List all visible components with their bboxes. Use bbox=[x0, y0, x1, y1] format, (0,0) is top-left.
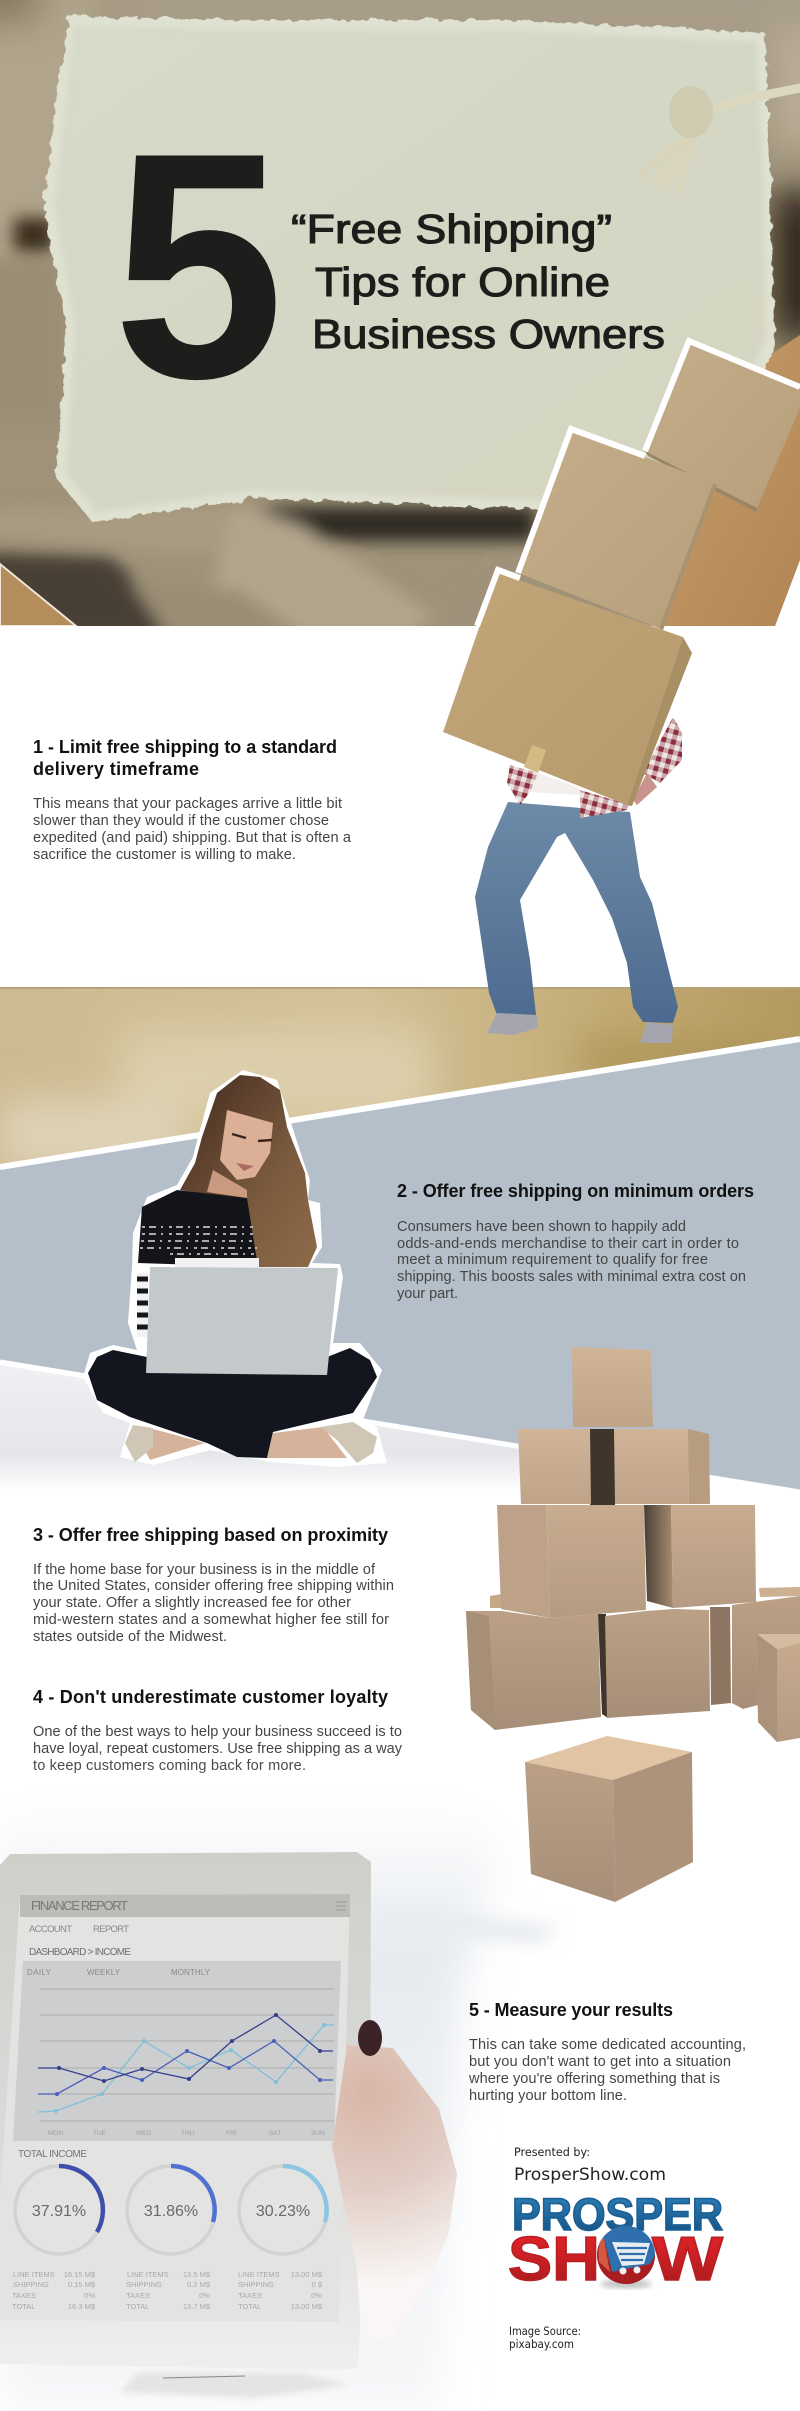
heading 2 block: 2 - Offer free shipping on minimum orders bbox=[397, 1181, 754, 1201]
income tables: 0% bbox=[199, 2291, 210, 2300]
screen header: ACCOUNT bbox=[29, 1924, 72, 1935]
tape bbox=[524, 745, 546, 773]
paragraph 4: One of the best ways to help your business succeed is to bbox=[33, 1724, 402, 1740]
income tables: LINE ITEMS bbox=[13, 2270, 55, 2279]
shoes bbox=[487, 1013, 673, 1043]
second row boxes bbox=[518, 1429, 710, 1504]
heading 4 block: 4 - Don't underestimate customer loyalty bbox=[33, 1687, 388, 1707]
income tables: 16.15 M$ bbox=[64, 2270, 96, 2279]
income tables: TAXES bbox=[12, 2291, 36, 2300]
paragraph 4 bbox=[33, 1724, 403, 1774]
title text: Tips for Online bbox=[315, 259, 610, 305]
pile of cardboard boxes bbox=[466, 1347, 800, 1902]
income tables: 0.2 M$ bbox=[187, 2280, 211, 2289]
paragraph 2: meet a minimum requirement to qualify for free bbox=[397, 1252, 708, 1268]
line chart: DAILY bbox=[27, 1968, 52, 1977]
lone box bbox=[525, 1736, 693, 1902]
tablet body bbox=[0, 1852, 371, 2370]
presented by text: ProsperShow.com bbox=[514, 2165, 666, 2184]
plaid shirt bbox=[507, 717, 682, 818]
screen header bbox=[20, 1894, 350, 1958]
total income donut charts: 37.91% bbox=[32, 2203, 86, 2220]
line chart: TUE bbox=[93, 2130, 107, 2137]
line chart: SAT bbox=[269, 2130, 281, 2137]
paragraph 2: Consumers have been shown to happily add bbox=[397, 1219, 686, 1235]
total income donut charts: 31.86% bbox=[144, 2203, 198, 2220]
paragraph 2 bbox=[397, 1219, 746, 1302]
income tables bbox=[12, 2270, 323, 2311]
kraft box backdrop bbox=[650, 335, 800, 626]
paragraph 3: If the home base for your business is in the middle of bbox=[33, 1562, 376, 1578]
screen header: REPORT bbox=[93, 1924, 129, 1935]
line chart: SUN bbox=[311, 2130, 325, 2137]
jeans bbox=[475, 802, 678, 1023]
paragraph 2: shipping. This boosts sales with minimal extra cost on bbox=[397, 1269, 746, 1285]
income tables: 0% bbox=[84, 2291, 95, 2300]
image source text bbox=[509, 2324, 581, 2351]
blue-grey diagonal panel bbox=[0, 1039, 800, 1520]
income tables: SHIPPING bbox=[13, 2280, 49, 2289]
paragraph 3: mid-western states and a somewhat higher fee still for bbox=[33, 1612, 389, 1628]
income tables: LINE ITEMS bbox=[238, 2270, 280, 2279]
screen header: FINANCE REPORT bbox=[31, 1898, 128, 1913]
heading 3 block: 3 - Offer free shipping based on proximity bbox=[33, 1525, 388, 1545]
striped sleeve bbox=[137, 1273, 148, 1337]
big number 5: 5 bbox=[113, 87, 284, 446]
top box bbox=[645, 341, 800, 512]
bottom row boxes bbox=[466, 1587, 800, 1742]
middle box bbox=[518, 429, 717, 630]
hero paper tag bbox=[43, 16, 800, 522]
image source text: Image Source: bbox=[509, 2324, 581, 2338]
top box bbox=[572, 1347, 653, 1427]
total income donut charts bbox=[15, 2149, 327, 2254]
paragraph 5: where you're offering something that is bbox=[468, 2071, 720, 2087]
fingernail bbox=[358, 2020, 382, 2056]
heading 5 block bbox=[468, 2000, 746, 2104]
icon: rope and knot bbox=[642, 86, 800, 192]
logo: Prosper Show: SH bbox=[508, 2225, 600, 2294]
cardboard corner bbox=[0, 564, 76, 626]
title text: “Free Shipping” bbox=[291, 206, 612, 252]
title bbox=[113, 87, 665, 446]
paragraph 2: odds-and-ends merchandise to their cart in order to bbox=[397, 1236, 739, 1252]
paragraph 2: your part. bbox=[397, 1286, 458, 1302]
heading 3 block bbox=[33, 1525, 394, 1645]
income tables: 13.5 M$ bbox=[183, 2270, 211, 2279]
paragraph 1: sacrifice the customer is willing to make. bbox=[33, 847, 296, 863]
image source text: pixabay.com bbox=[509, 2337, 574, 2351]
screen bbox=[0, 1894, 350, 2322]
line chart: THU bbox=[181, 2130, 195, 2137]
income tables: TOTAL bbox=[126, 2302, 149, 2311]
income tables: 0.15 M$ bbox=[68, 2280, 96, 2289]
icon: globe with shopping cart bbox=[597, 2226, 655, 2288]
income tables: SHIPPING bbox=[126, 2280, 162, 2289]
paragraph 4: to keep customers coming back for more. bbox=[33, 1758, 306, 1774]
income tables: TOTAL bbox=[12, 2302, 35, 2311]
heading 1 block: delivery timeframe bbox=[33, 759, 199, 779]
hand holding tablet bbox=[332, 2020, 457, 2345]
paragraph 5 bbox=[468, 2037, 746, 2104]
third row boxes bbox=[497, 1505, 756, 1618]
income tables: TAXES bbox=[126, 2291, 150, 2300]
face bbox=[207, 1110, 273, 1198]
paragraph 3 bbox=[33, 1562, 394, 1645]
sweater bbox=[138, 1190, 259, 1267]
income tables: 16.3 M$ bbox=[68, 2302, 96, 2311]
logo: Prosper Show: PROSPER bbox=[512, 2189, 723, 2240]
stacked shipping boxes bbox=[443, 341, 800, 806]
paragraph 5: hurting your bottom line. bbox=[469, 2088, 627, 2104]
line chart: FRI bbox=[226, 2130, 237, 2137]
screen header: DASHBOARD > INCOME bbox=[29, 1947, 131, 1958]
paragraph 5: This can take some dedicated accounting, bbox=[469, 2037, 746, 2053]
line chart: MON bbox=[48, 2130, 63, 2137]
white sticker outline bbox=[83, 1070, 387, 1467]
tablet and hand scene bbox=[0, 1800, 560, 2411]
heading 2 block bbox=[397, 1181, 754, 1302]
line chart: WED bbox=[136, 2130, 151, 2137]
hair bbox=[180, 1075, 317, 1267]
total income donut charts: 30.23% bbox=[256, 2203, 310, 2220]
heading 5 block: 5 - Measure your results bbox=[469, 2000, 673, 2020]
income tables: LINE ITEMS bbox=[127, 2270, 169, 2279]
man carrying boxes bbox=[475, 717, 682, 1043]
heading 1 block bbox=[33, 737, 352, 863]
paragraph 3: states outside of the Midwest. bbox=[33, 1629, 227, 1645]
legs bbox=[88, 1348, 377, 1458]
income tables: 13.00 M$ bbox=[291, 2302, 323, 2311]
presented by text: Presented by: bbox=[514, 2145, 590, 2159]
dark gap between boxes bbox=[590, 1429, 615, 1505]
heading 1 block: 1 - Limit free shipping to a standard bbox=[33, 737, 337, 757]
title text: Business Owners bbox=[312, 311, 665, 357]
income tables: 0 $ bbox=[312, 2280, 323, 2289]
woman with laptop bbox=[83, 1070, 387, 1467]
total income donut charts: TOTAL INCOME bbox=[18, 2149, 87, 2160]
paragraph 3: the United States, consider offering free shipping within bbox=[33, 1578, 394, 1594]
paragraph 3: your state. Offer a slightly increased fee for other bbox=[33, 1595, 351, 1611]
income tables: 0% bbox=[311, 2291, 322, 2300]
income tables: 13.7 M$ bbox=[183, 2302, 211, 2311]
income tables: 13.00 M$ bbox=[291, 2270, 323, 2279]
logo: Prosper Show: O bbox=[604, 2225, 652, 2294]
paragraph 5: but you don't want to get into a situation bbox=[469, 2054, 731, 2070]
paragraph 1: slower than they would if the customer chose bbox=[33, 813, 329, 829]
soft table shadow bbox=[0, 1800, 500, 2411]
income tables: TAXES bbox=[238, 2291, 262, 2300]
title text bbox=[291, 206, 665, 357]
large box bbox=[443, 570, 692, 806]
logo: Prosper Show bbox=[508, 2189, 724, 2294]
floor bbox=[0, 987, 800, 1177]
income tables: SHIPPING bbox=[238, 2280, 274, 2289]
paragraph 4: have loyal, repeat customers. Use free shipping as a way bbox=[33, 1741, 403, 1757]
heading 4 block bbox=[33, 1687, 403, 1774]
paragraph 1 bbox=[33, 796, 352, 863]
income tables: TOTAL bbox=[238, 2302, 261, 2311]
paragraph 1: This means that your packages arrive a little bit bbox=[33, 796, 342, 812]
paragraph 1: expedited (and paid) shipping. But that is often a bbox=[33, 830, 352, 846]
line chart bbox=[13, 1961, 341, 2141]
line chart: MONTHLY bbox=[171, 1968, 211, 1977]
line chart: WEEKLY bbox=[87, 1968, 121, 1977]
shoes and feet bbox=[125, 1422, 377, 1463]
laptop bbox=[146, 1267, 338, 1375]
presented by text bbox=[514, 2145, 666, 2184]
logo: Prosper Show: W bbox=[652, 2225, 724, 2294]
hero panel: crumpled kraft paper background bbox=[0, 0, 800, 640]
